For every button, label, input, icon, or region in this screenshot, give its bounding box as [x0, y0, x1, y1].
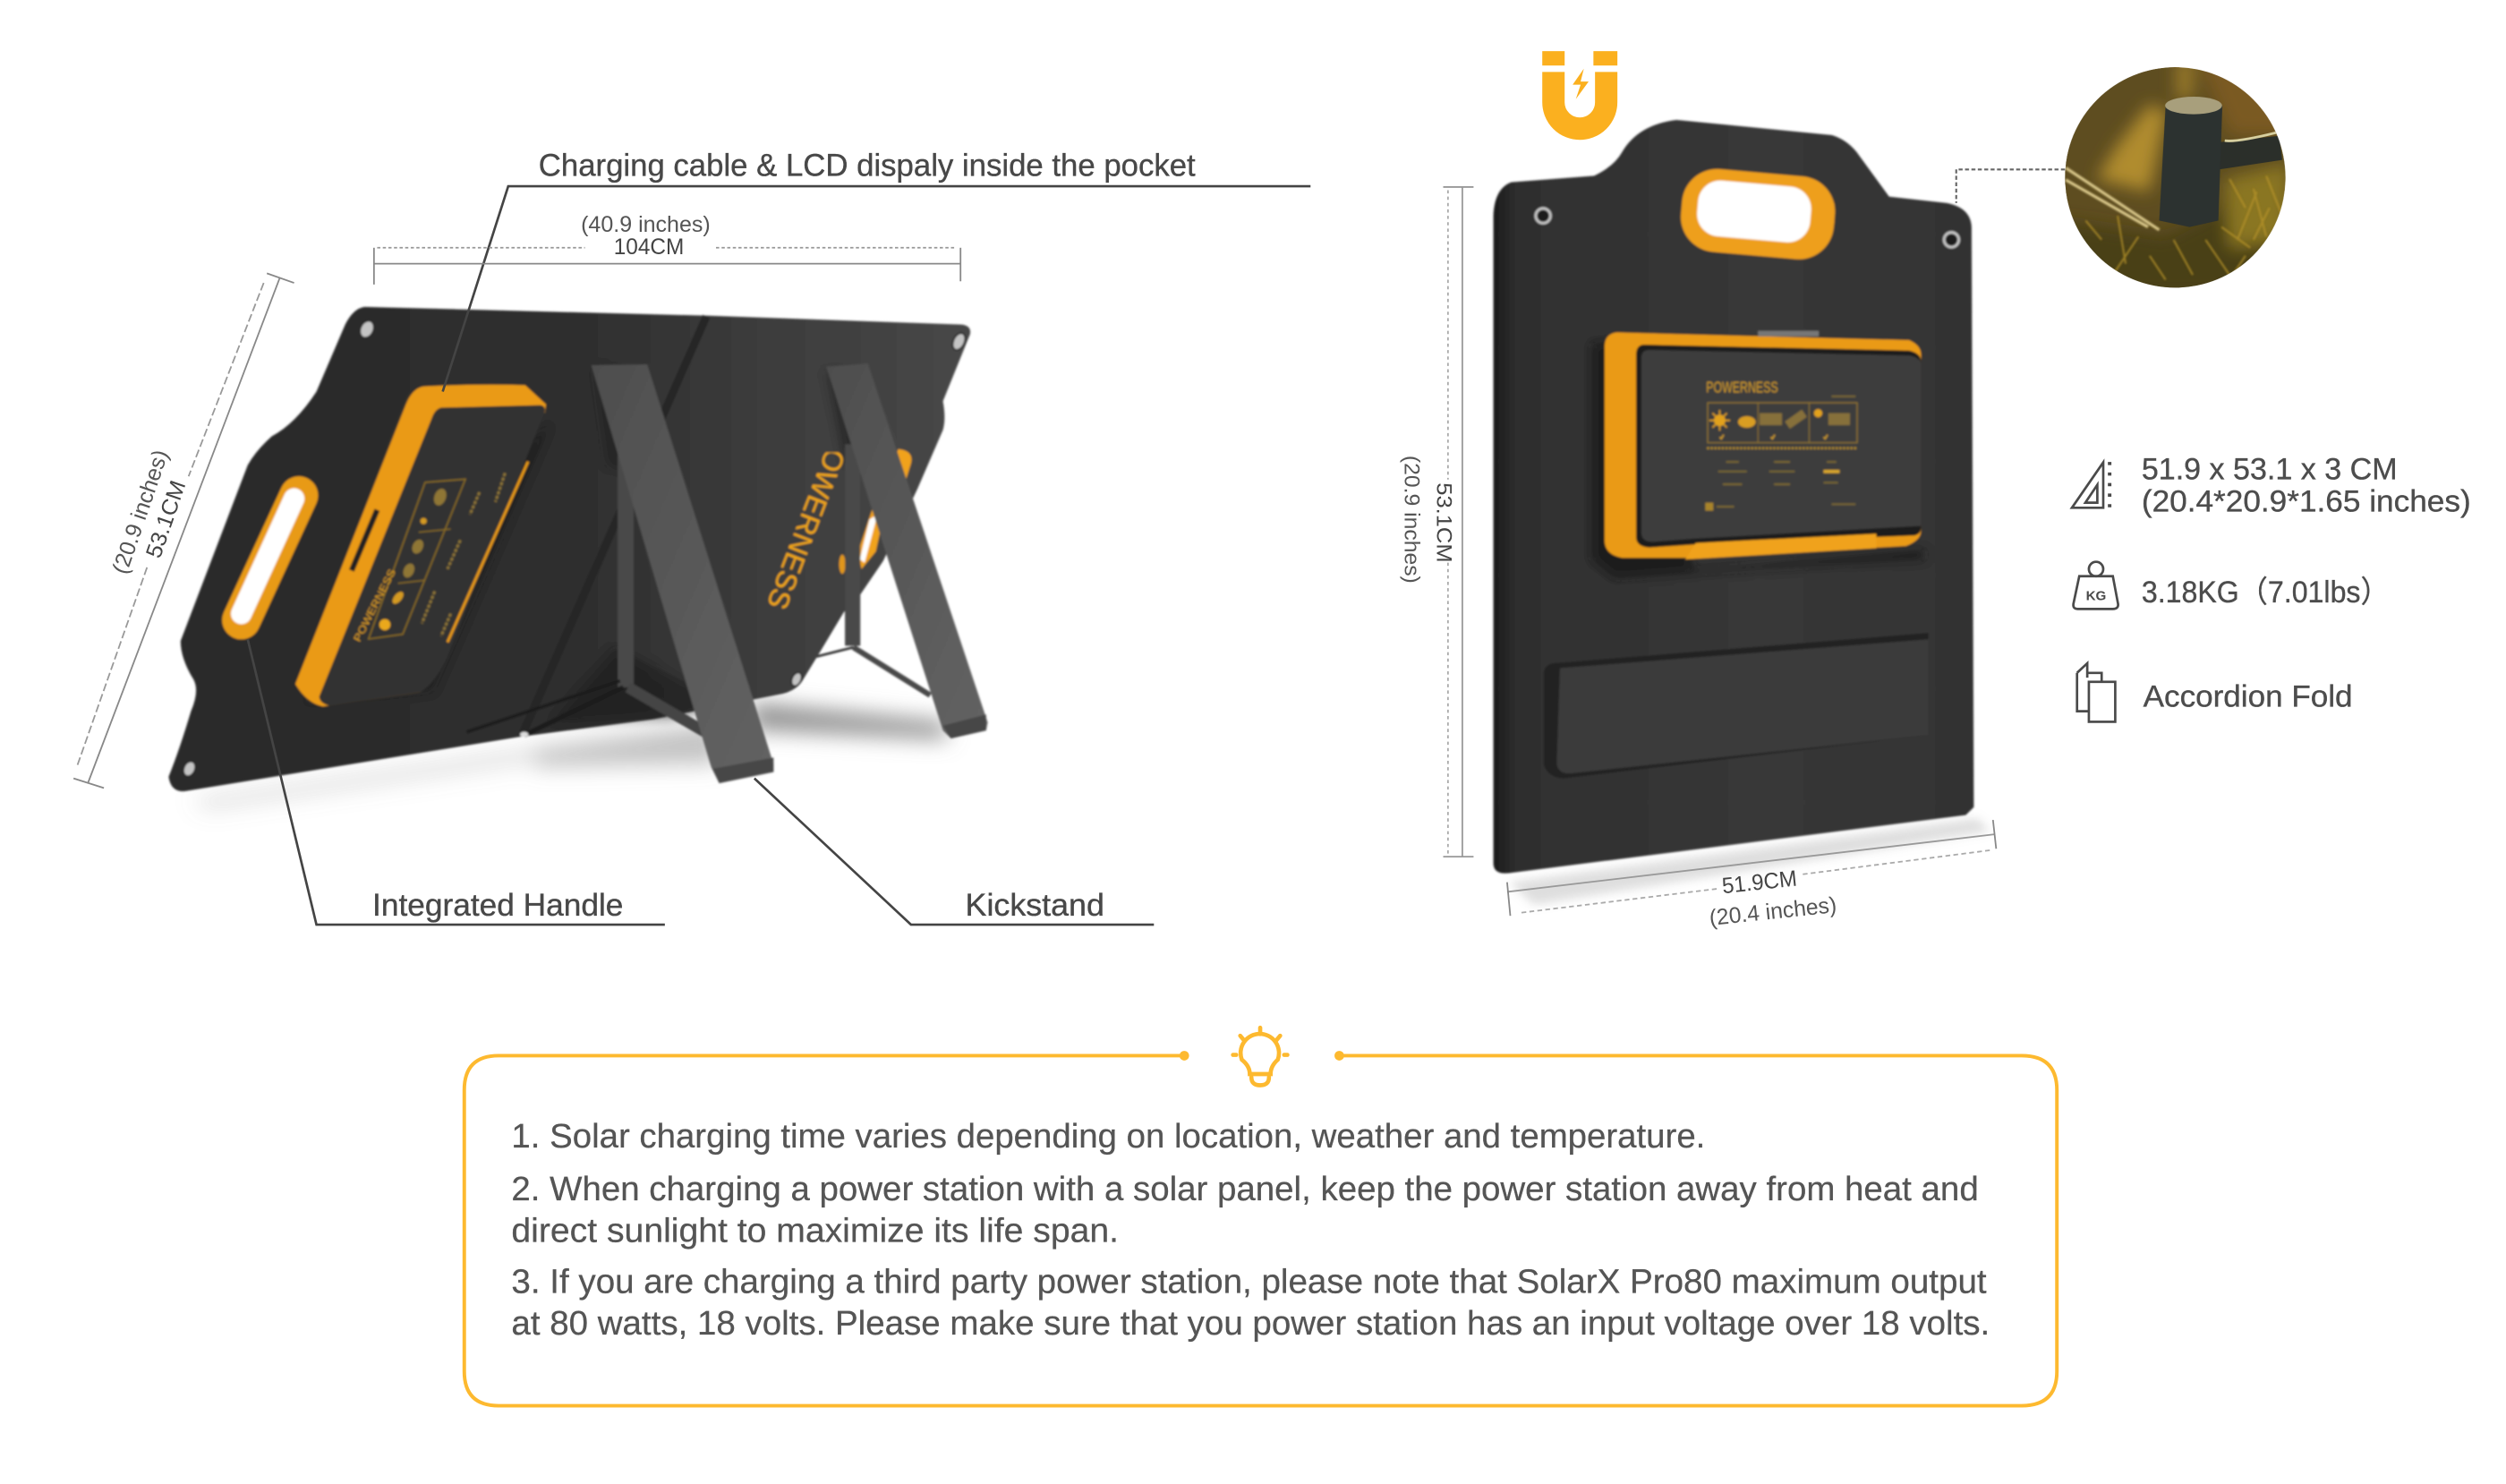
- photo: ground stake in grass: [2064, 67, 2286, 288]
- width dimension 104CM: (40.9 inches): [581, 212, 711, 237]
- spec: dimensions: [2142, 453, 2471, 518]
- kickstand struts: [466, 444, 853, 738]
- pocket dark edge: [1636, 345, 1921, 548]
- icon: weight: KG: [2086, 589, 2106, 604]
- stake top: [2165, 97, 2222, 115]
- pocket brand text: POWERNESS: [352, 567, 398, 644]
- guy ropes: [2066, 168, 2159, 230]
- kickstand one: [592, 364, 773, 783]
- left integrated handle: [242, 496, 299, 620]
- stake body: [2159, 106, 2222, 227]
- shadow beside kickstand top: [594, 368, 871, 480]
- handle: [1678, 166, 1838, 262]
- height dimension right 53.1CM: [1400, 187, 1473, 857]
- stand foot details: [712, 714, 986, 783]
- pocket zipper: [352, 510, 377, 571]
- height dimension right 53.1CM: 53.1CM: [1431, 482, 1455, 563]
- note 3: 3. If you are charging a third party power station, please note that SolarX Pro80 maximum output: [511, 1263, 1987, 1301]
- right handle opening: [840, 449, 911, 574]
- icon: magnet: [1542, 51, 1617, 129]
- note 2: direct sunlight to maximize its life span.: [511, 1212, 1119, 1250]
- note 3: at 80 watts, 18 volts. Please make sure that you power station has an input voltage over 18 volts.: [511, 1304, 1990, 1343]
- pocket dark face: [320, 405, 545, 705]
- pocket dark face: [1641, 350, 1921, 542]
- label: kickstand: [754, 779, 1154, 925]
- width dimension 104CM: [374, 212, 960, 285]
- grass blades: [2085, 175, 2282, 280]
- pocket LCD markings: [369, 473, 505, 639]
- height dimension left 53.1CM: 53.1CM: [141, 477, 191, 561]
- icon: weight: [2074, 562, 2118, 609]
- grommets: [1536, 209, 1959, 247]
- callout: dotted connector to stake photo: [1956, 169, 2065, 203]
- pocket shadow: [1592, 339, 1924, 578]
- pocket shadow: [303, 423, 551, 704]
- note 3: [511, 1263, 1990, 1343]
- shadow beneath kickstand: [551, 647, 727, 722]
- note 2: 2. When charging a power station with a solar panel, keep the power station away from heat and: [511, 1170, 1979, 1208]
- spec: fold: Accordion Fold: [2144, 679, 2353, 713]
- stake arm cord: [2225, 132, 2276, 141]
- label: kickstand: Kickstand: [966, 888, 1104, 923]
- height dimension left 53.1CM: (20.9 inches): [107, 447, 174, 577]
- panel: unfolded solar panel with kickstands: [168, 307, 988, 809]
- panel: folded solar panel front view: [1494, 120, 1990, 905]
- label: charging cable: [443, 148, 1310, 392]
- panel: notes box: [465, 1028, 2057, 1406]
- spec: dimensions: (20.4*20.9*1.65 inches): [2142, 484, 2471, 518]
- lower pocket flap: [1556, 639, 1929, 773]
- spec: weight: 3.18KG（7.01lbs）: [2142, 576, 2390, 610]
- kickstand two: [826, 363, 988, 738]
- hinge dot: [520, 732, 528, 737]
- width dimension 104CM: 104CM: [614, 235, 684, 260]
- icon: set square: [2072, 462, 2110, 510]
- ground shadow: [192, 704, 946, 809]
- label: integrated handle: [248, 639, 665, 925]
- back strut of kickstand two visible through gap: [815, 439, 930, 695]
- panel body: [1494, 120, 1973, 874]
- stake arm: [2220, 136, 2282, 169]
- lower pocket: [1544, 633, 1929, 779]
- icon: light bulb: [1233, 1028, 1287, 1085]
- height dimension right 53.1CM: (20.9 inches): [1400, 456, 1424, 584]
- spec: dimensions: 51.9 x 53.1 x 3 CM: [2142, 453, 2398, 487]
- icon: accordion fold: [2077, 663, 2115, 721]
- note 2: [511, 1170, 1979, 1250]
- floor shadow: [1509, 818, 1990, 905]
- fold seam: [523, 317, 706, 734]
- pocket bottom strap: [1685, 533, 1876, 559]
- LCD panel content: [1705, 378, 1857, 511]
- width dimension right 51.9CM: 51.9CM: [1721, 866, 1798, 899]
- width dimension right 51.9CM: (20.4 inches): [1708, 892, 1837, 931]
- brand lettering on panel: POWERNESS: [761, 426, 858, 614]
- label: charging cable: Charging cable & LCD dispaly inside the pocket: [539, 148, 1196, 183]
- grommets: [181, 319, 967, 778]
- LCD panel content: POWERNESS: [1706, 378, 1778, 396]
- pocket zipper pull: [1758, 331, 1819, 337]
- pocket edge stripe: [448, 462, 528, 643]
- pocket yellow frame: [295, 385, 546, 706]
- pocket yellow frame: [1605, 332, 1921, 558]
- folded panel body: [168, 307, 970, 791]
- label: integrated handle: Integrated Handle: [372, 888, 623, 923]
- height dimension left 53.1CM: [73, 273, 294, 788]
- width dimension right 51.9CM: [1507, 820, 1996, 931]
- note 1: 1. Solar charging time varies depending on location, weather and temperature.: [511, 1117, 1705, 1156]
- notes separators dots: [1180, 1051, 1189, 1061]
